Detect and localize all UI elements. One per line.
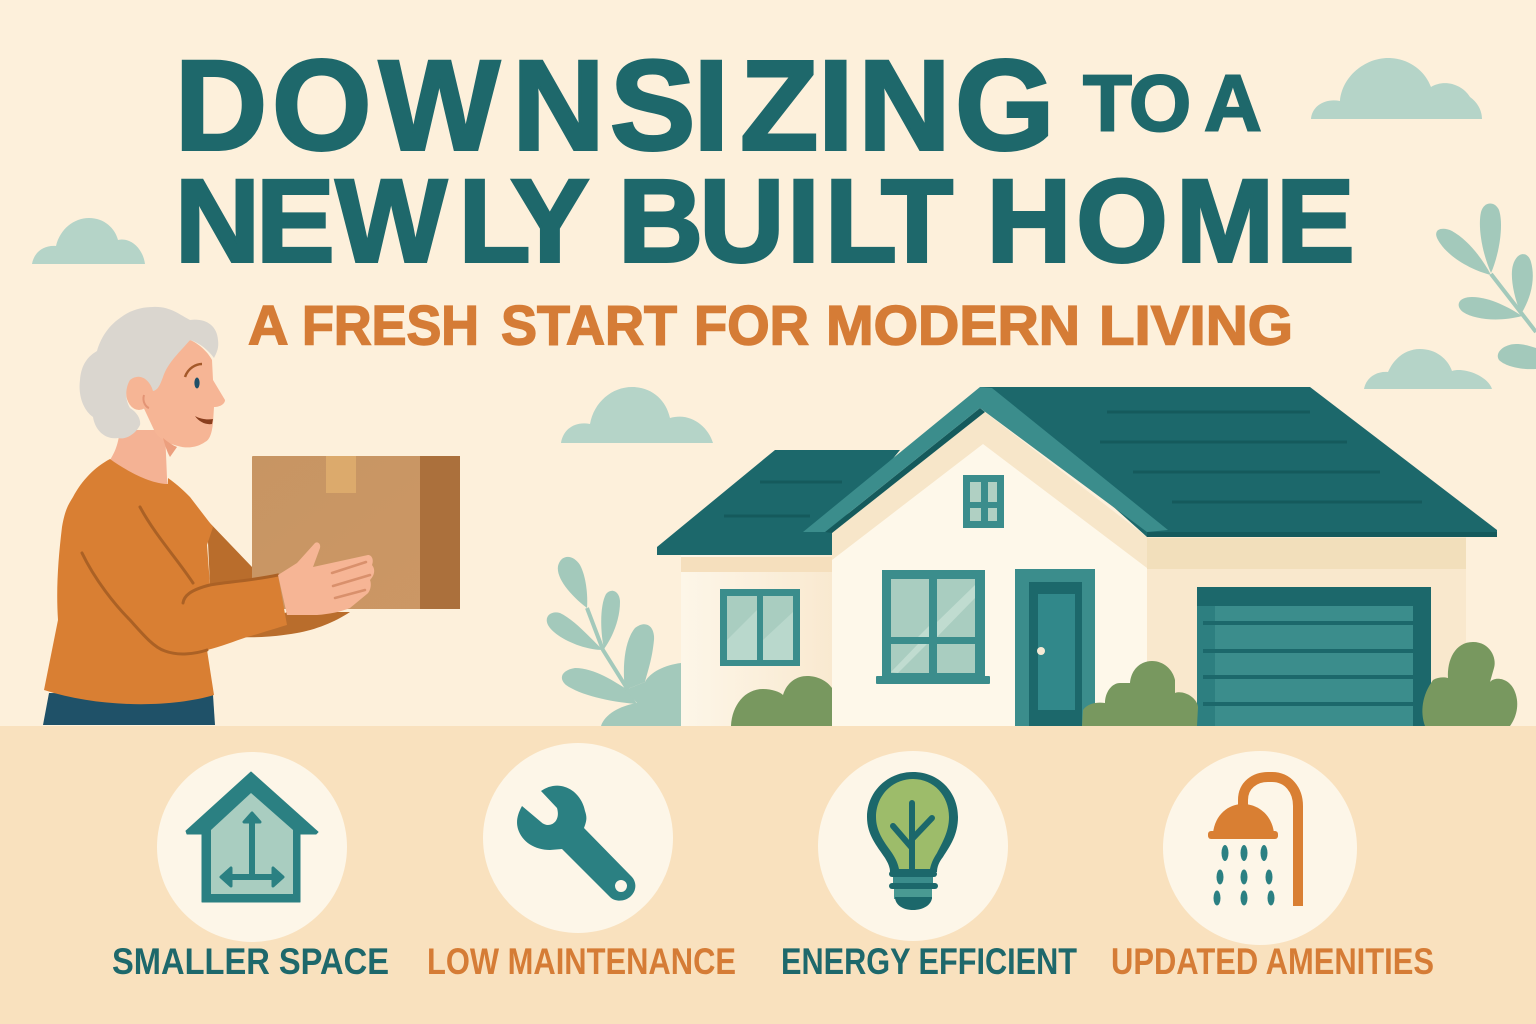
plant: beside house xyxy=(547,557,681,726)
cloud: right middle xyxy=(1364,349,1492,389)
cloud: top right xyxy=(1311,58,1482,119)
trousers xyxy=(43,693,215,725)
front window xyxy=(882,570,985,677)
house walls xyxy=(681,555,833,726)
feature: low maintenance xyxy=(427,743,736,982)
left roof xyxy=(657,450,900,555)
subtitle: MODERN xyxy=(826,294,1080,356)
neck xyxy=(110,430,168,486)
feature: energy efficient xyxy=(781,751,1077,982)
hand xyxy=(278,542,374,615)
icon: light bulb xyxy=(867,772,958,910)
icon: wrench xyxy=(517,786,635,901)
ear xyxy=(126,374,152,410)
plant: top right leaves xyxy=(1436,203,1536,369)
main roof xyxy=(980,387,1497,537)
door xyxy=(1015,569,1095,726)
left window xyxy=(720,589,800,666)
far arm xyxy=(207,520,350,640)
person xyxy=(43,307,460,725)
feature: updated amenities xyxy=(1111,751,1434,982)
house xyxy=(657,387,1517,726)
label: SMALLER SPACE xyxy=(112,941,389,982)
face xyxy=(140,340,225,447)
label: ENERGY EFFICIENT xyxy=(781,941,1077,982)
subtitle: FRESH xyxy=(302,294,479,356)
icon: shower xyxy=(1208,777,1298,906)
subtitle: START xyxy=(501,294,677,356)
mouth xyxy=(195,416,213,424)
title: TO A xyxy=(1083,59,1262,148)
hair xyxy=(80,307,218,438)
box xyxy=(252,456,460,609)
attic window xyxy=(963,475,1004,528)
feature: smaller space xyxy=(112,752,389,982)
gable trim xyxy=(825,408,985,533)
cloud: left xyxy=(32,218,145,264)
label: LOW MAINTENANCE xyxy=(427,941,736,982)
sweater xyxy=(44,459,287,704)
cloud: center xyxy=(561,387,713,443)
title xyxy=(175,34,1355,288)
label: UPDATED AMENITIES xyxy=(1111,941,1434,982)
garage door xyxy=(1197,587,1431,726)
title: DOWNSIZING xyxy=(175,34,1055,178)
subtitle: FOR xyxy=(694,294,809,356)
eye xyxy=(194,378,200,388)
subtitle: LIVING xyxy=(1099,294,1293,356)
bushes xyxy=(731,642,1517,726)
subtitle: A xyxy=(248,294,287,356)
icon: house with arrows xyxy=(186,772,318,902)
bottom band xyxy=(0,726,1536,1024)
title: NEWLY BUILT HOME xyxy=(175,156,1355,288)
